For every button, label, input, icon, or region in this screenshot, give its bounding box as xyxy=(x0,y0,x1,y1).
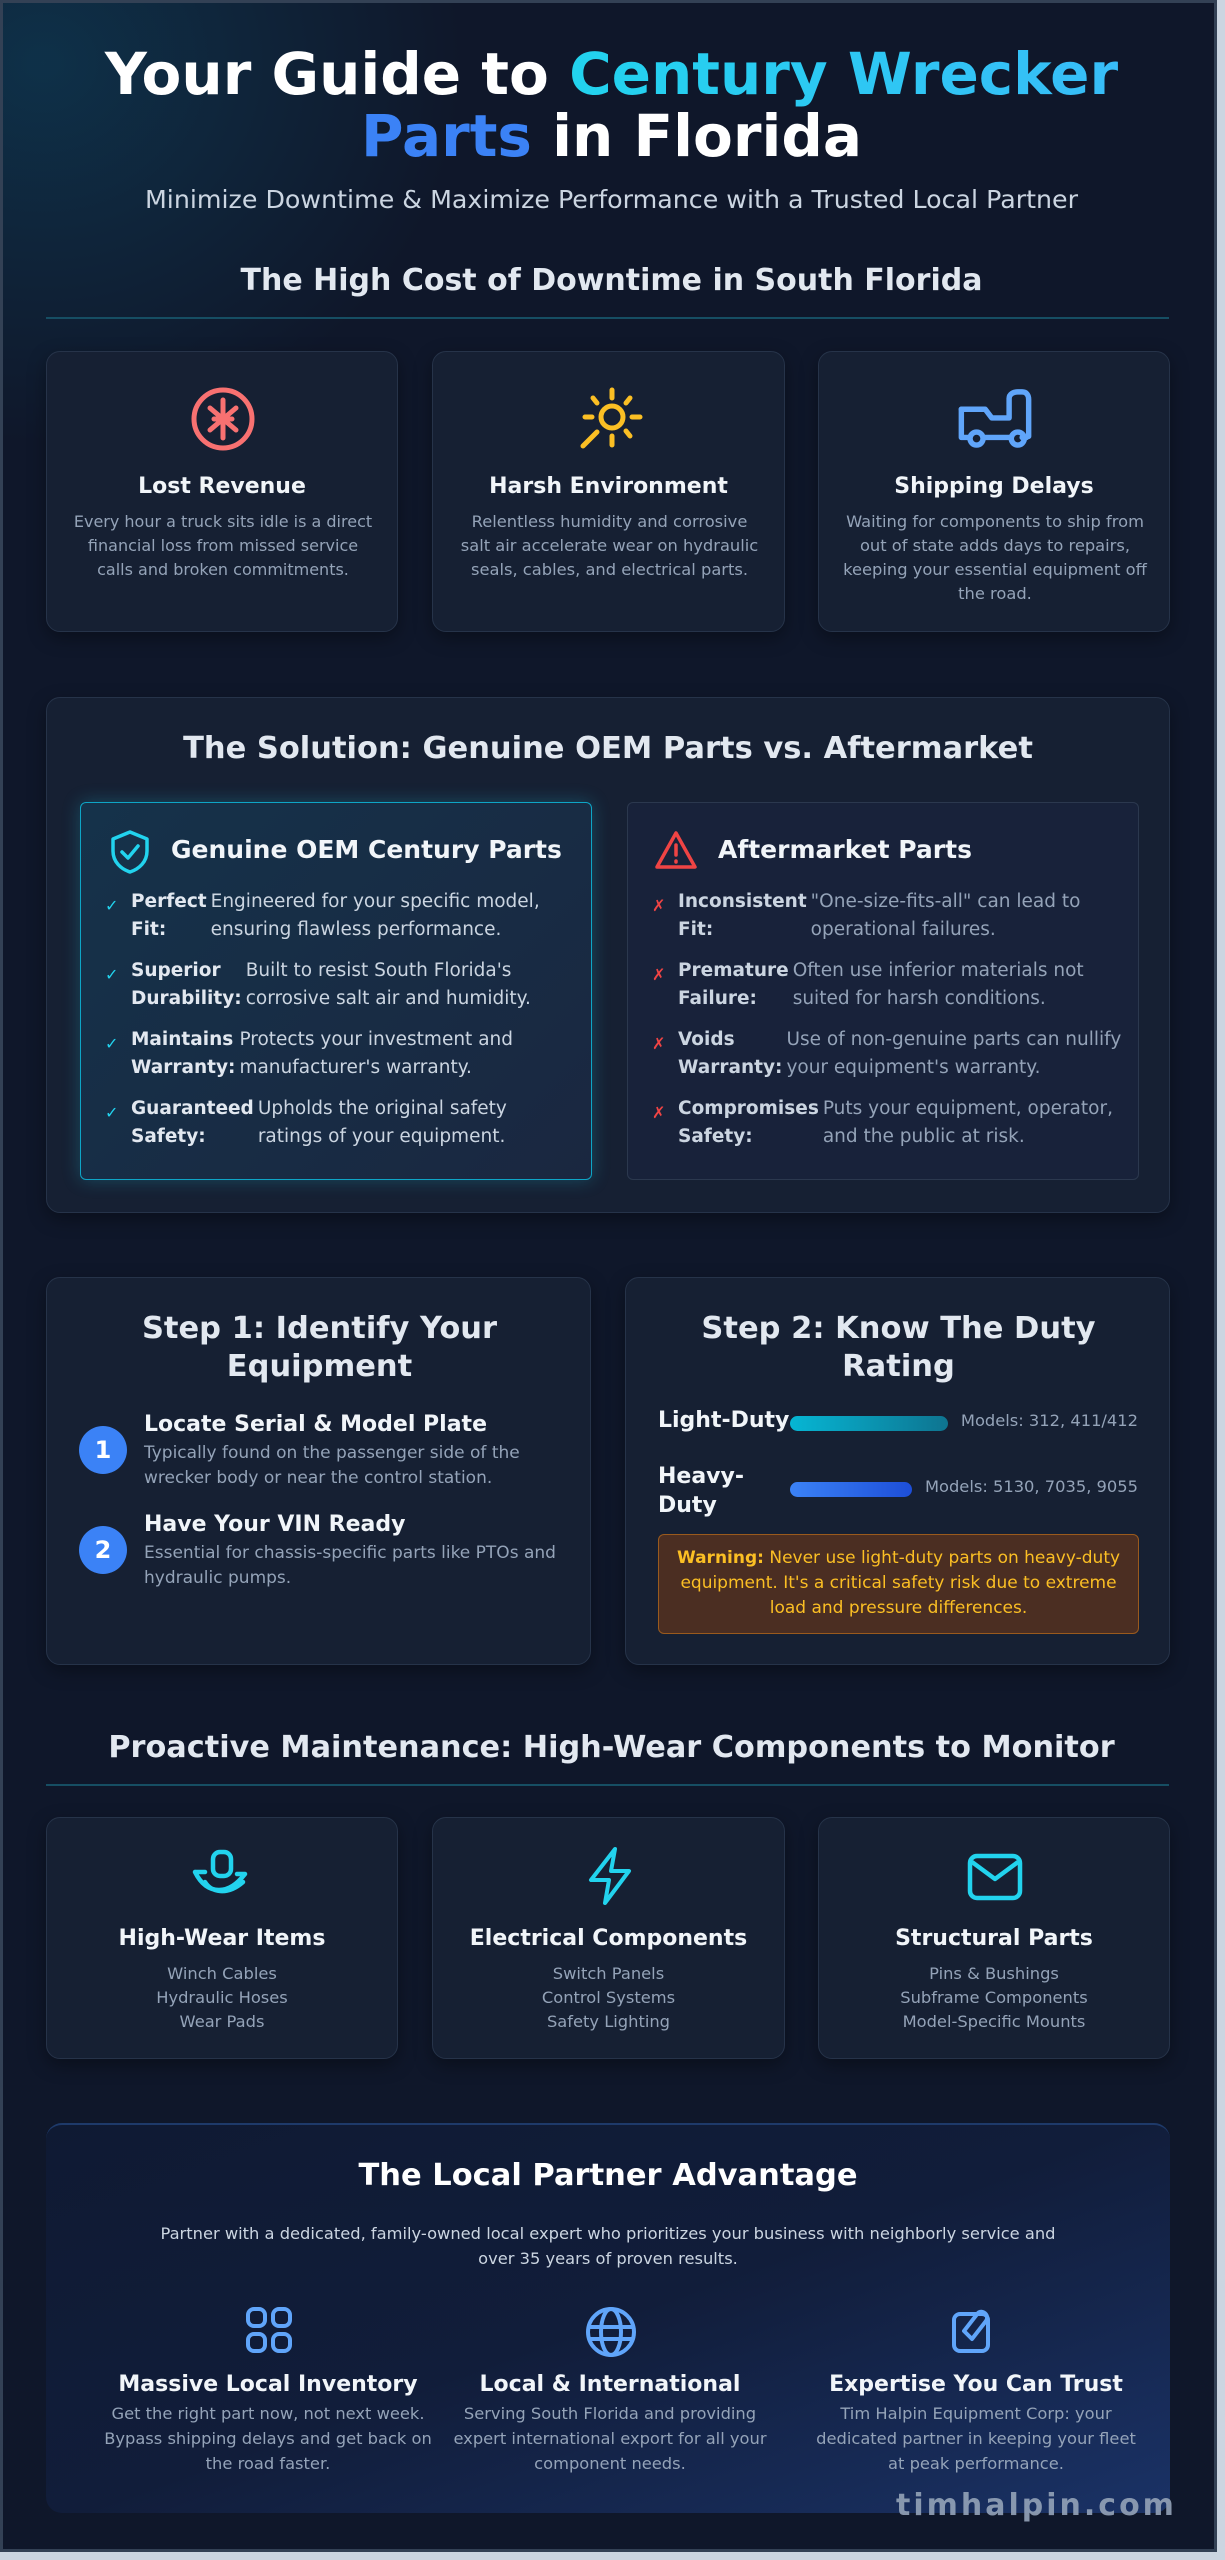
column: inventory: Get the right part now, not next week. Bypass shipping delays and get back on the road faster. xyxy=(104,2404,432,2473)
list: aftermarket risks: ✗ xyxy=(652,965,665,984)
intro paragraph: Partner with a dedicated, family-owned local expert who prioritizes your business with neighborly service and over 35 years of proven results. xyxy=(160,2224,1056,2268)
heading: high cost of downtime: The High Cost of Downtime in South Florida xyxy=(241,263,982,298)
heading: solution: The Solution: Genuine OEM Parts vs. Aftermarket xyxy=(183,731,1033,766)
card text: Every hour a truck sits idle is a direct financial loss from missed service calls and broken commitments. xyxy=(74,512,372,579)
card title: Shipping Delays xyxy=(894,474,1094,499)
title: Your Guide to Century Wrecker xyxy=(105,40,1118,108)
step item 1: Typically found on the passenger side of the wrecker body or near the control station. xyxy=(144,1443,520,1488)
subtitle: Minimize Downtime & Maximize Performance with a Trusted Local Partner xyxy=(145,185,1078,214)
list: OEM benefits: Superior Durability: xyxy=(131,960,242,1009)
list: OEM benefits: Maintains Warranty: xyxy=(131,1029,235,1078)
list: OEM benefits: Engineered for your specific model, ensuring flawless performance. xyxy=(211,891,540,940)
icon: truck xyxy=(958,389,1032,448)
card list: Pins & Bushings xyxy=(929,1964,1059,1983)
list: aftermarket risks: Inconsistent Fit: xyxy=(678,891,807,940)
list: OEM benefits: ✓ xyxy=(105,1103,118,1122)
panel: step 2 xyxy=(625,1277,1170,1665)
icon: lightning xyxy=(588,1847,632,1905)
title: Parts in Florida xyxy=(361,102,862,170)
warning callout xyxy=(658,1534,1139,1634)
card list: Wear Pads xyxy=(180,2012,264,2031)
light duty bar: Light-Duty xyxy=(658,1408,789,1433)
step 2 heading: Step 2: Know The Duty Rating xyxy=(701,1311,1096,1384)
list: aftermarket risks: ✗ xyxy=(652,1103,665,1122)
column: local & international: Local & International xyxy=(480,2372,740,2397)
panel: solution xyxy=(46,697,1170,1213)
card list: Hydraulic Hoses xyxy=(156,1988,288,2007)
column: expertise xyxy=(816,2310,1136,2473)
list: OEM benefits: Protects your investment and manufacturer's warranty. xyxy=(239,1029,513,1078)
box heading: Genuine OEM Century Parts xyxy=(171,835,562,864)
column: expertise: Tim Halpin Equipment Corp: your dedicated partner in keeping your fleet at peak performance. xyxy=(816,2404,1136,2473)
panel: local partner advantage xyxy=(46,2123,1170,2513)
card list: Subframe Components xyxy=(900,1988,1088,2007)
card: electrical components xyxy=(432,1817,785,2059)
step item 1: 1 xyxy=(95,1436,111,1464)
icon: cable xyxy=(192,1850,248,1894)
list: aftermarket risks: "One-size-fits-all" can lead to operational failures. xyxy=(811,891,1080,940)
card list: Safety Lighting xyxy=(547,2012,670,2031)
box heading: Aftermarket Parts xyxy=(718,835,972,864)
card text: Relentless humidity and corrosive salt air accelerate wear on hydraulic seals, cables, and electrical parts. xyxy=(461,512,758,579)
icon: box xyxy=(968,1854,1022,1900)
title xyxy=(104,40,1118,170)
heavy duty bar: Heavy-Duty xyxy=(658,1464,744,1518)
column: inventory xyxy=(104,2307,432,2473)
warning callout: Warning: Never use light-duty parts on heavy-duty equipment. It's a critical safety risk due to extreme load and pressure differences. xyxy=(677,1548,1120,1618)
card text: Waiting for components to ship from out of state adds days to repairs, keeping your essential equipment off the road. xyxy=(843,512,1147,603)
card: shipping delays xyxy=(818,351,1170,632)
box: genuine OEM xyxy=(80,802,592,1180)
icon: badge xyxy=(952,2310,990,2353)
step item 2: Have Your VIN Ready xyxy=(144,1512,405,1537)
step item 2: Essential for chassis-specific parts like PTOs and hydraulic pumps. xyxy=(144,1543,556,1588)
list: aftermarket risks: Premature Failure: xyxy=(678,960,789,1009)
icon: warning xyxy=(655,831,697,869)
list: aftermarket risks: Voids Warranty: xyxy=(678,1029,782,1078)
card list: Model-Specific Mounts xyxy=(903,2012,1085,2031)
step 1 heading: Step 1: Identify Your Equipment xyxy=(142,1311,497,1384)
card: lost revenue xyxy=(46,351,398,632)
list: OEM benefits: Perfect Fit: xyxy=(131,891,207,940)
icon: sun xyxy=(580,388,642,448)
column: expertise: Expertise You Can Trust xyxy=(829,2372,1123,2397)
step item 2 xyxy=(79,1512,556,1588)
column: local & international xyxy=(453,2307,767,2473)
card title: High-Wear Items xyxy=(119,1926,325,1951)
list: OEM benefits: ✓ xyxy=(105,965,118,984)
heavy duty bar: Models: 5130, 7035, 9055 xyxy=(925,1477,1138,1496)
list: aftermarket risks: ✗ xyxy=(652,896,665,915)
list: OEM benefits: Built to resist South Florida's corrosive salt air and humidity. xyxy=(246,960,531,1009)
card list xyxy=(156,1964,288,2031)
card title: Electrical Components xyxy=(470,1926,747,1951)
column: local & international: Serving South Florida and providing expert international export for all your component needs. xyxy=(453,2404,767,2473)
card list: Winch Cables xyxy=(167,1964,277,1983)
card: high-wear items xyxy=(46,1817,398,2059)
list: OEM benefits: ✓ xyxy=(105,1034,118,1053)
list: OEM benefits: Upholds the original safety ratings of your equipment. xyxy=(258,1098,507,1147)
icon: globe xyxy=(586,2307,636,2357)
step item 2: 2 xyxy=(95,1536,111,1564)
card list: Switch Panels xyxy=(553,1964,664,1983)
list: aftermarket risks: ✗ xyxy=(652,1034,665,1053)
card title: Structural Parts xyxy=(895,1926,1093,1951)
list: aftermarket risks xyxy=(652,891,1121,1147)
step item 1 xyxy=(79,1412,520,1488)
panel: step 1 xyxy=(46,1277,591,1665)
light duty bar xyxy=(658,1408,1138,1433)
card list xyxy=(542,1964,675,2031)
card title: Harsh Environment xyxy=(489,474,728,499)
icon: grid xyxy=(246,2307,292,2353)
heading: proactive maintenance: Proactive Maintenance: High-Wear Components to Monitor xyxy=(108,1730,1115,1765)
list: aftermarket risks: Often use inferior materials not suited for harsh conditions. xyxy=(793,960,1084,1009)
list: OEM benefits: ✓ xyxy=(105,896,118,915)
list: aftermarket risks: Use of non-genuine parts can nullify your equipment's warranty. xyxy=(786,1029,1121,1078)
box: aftermarket xyxy=(627,802,1139,1180)
heading: local partner: The Local Partner Advantage xyxy=(358,2158,858,2193)
light duty bar: Models: 312, 411/412 xyxy=(961,1411,1138,1430)
icon: lost revenue xyxy=(192,388,254,450)
heavy duty bar xyxy=(658,1464,1138,1518)
card: harsh environment xyxy=(432,351,785,632)
card list xyxy=(900,1964,1088,2031)
list: OEM benefits: Guaranteed Safety: xyxy=(131,1098,254,1147)
list: aftermarket risks: Compromises Safety: xyxy=(678,1098,819,1147)
icon: shield xyxy=(111,830,149,874)
watermark: timhalpin.com: timhalpin.com xyxy=(896,2488,1177,2523)
card: structural parts xyxy=(818,1817,1170,2059)
card list: Control Systems xyxy=(542,1988,675,2007)
column: inventory: Massive Local Inventory xyxy=(118,2372,418,2397)
list: OEM benefits xyxy=(105,891,540,1147)
step item 1: Locate Serial & Model Plate xyxy=(144,1412,487,1437)
card title: Lost Revenue xyxy=(138,474,306,499)
list: aftermarket risks: Puts your equipment, operator, and the public at risk. xyxy=(823,1098,1113,1147)
